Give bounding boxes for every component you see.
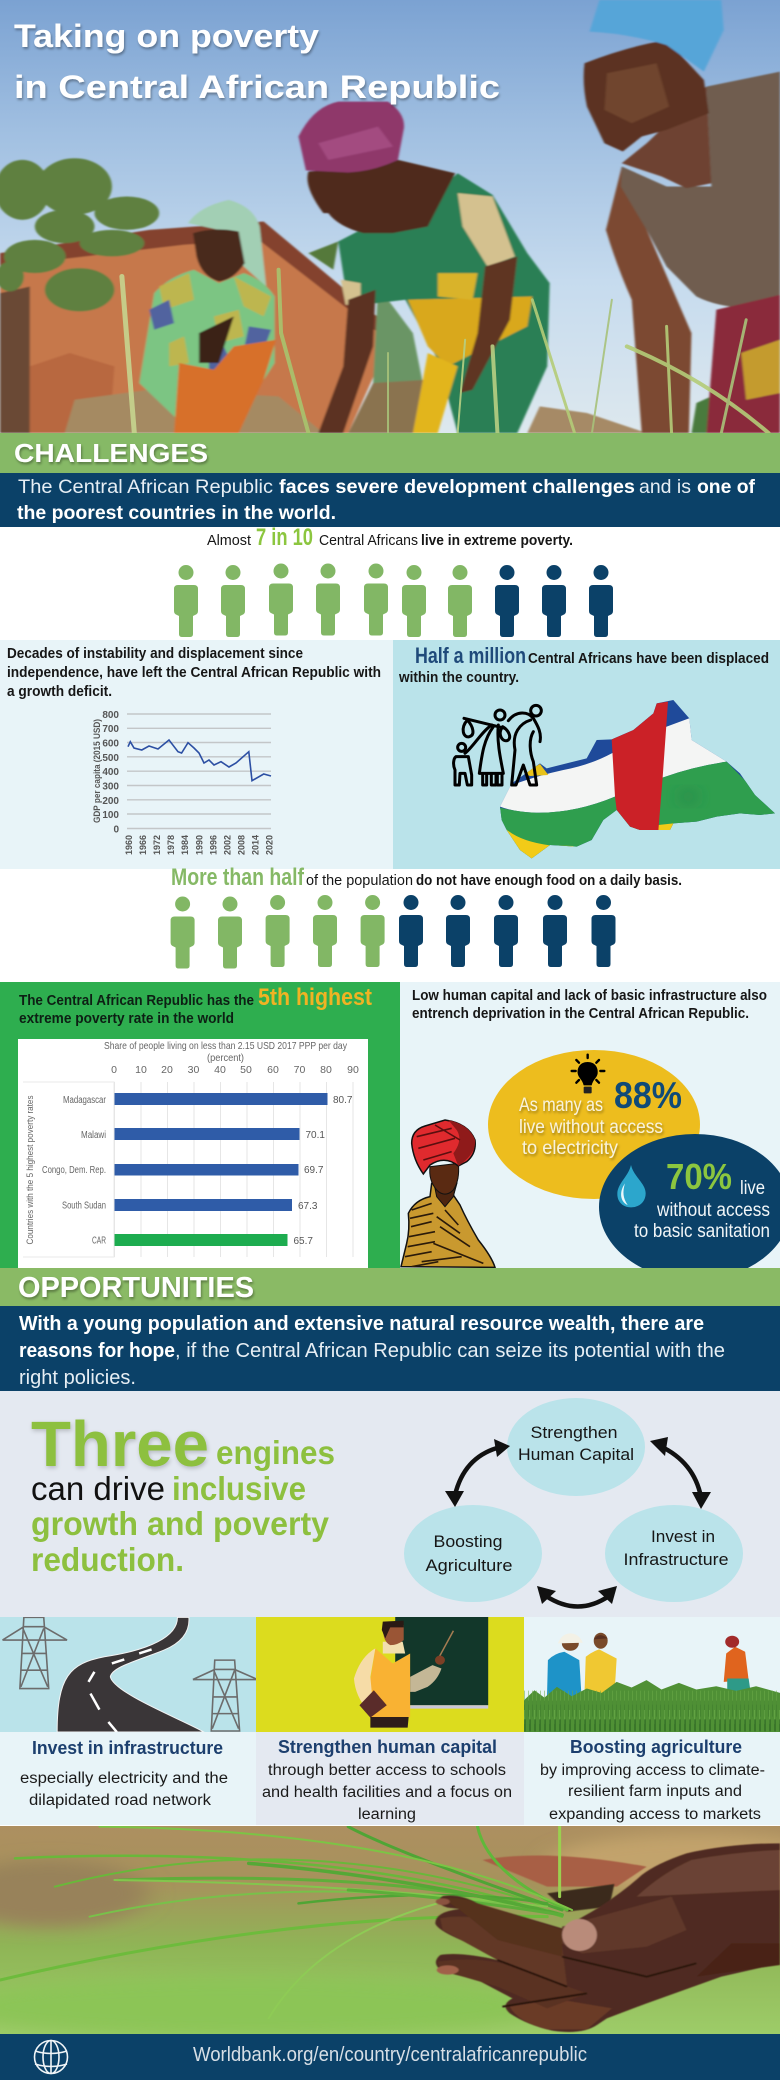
line chart: GDP per capita: 1978 [166, 835, 176, 855]
challenges intro band: and is [639, 476, 691, 498]
bar chart: extreme poverty rates: Share of people living on less than 2.15 USD 2017 PPP per day [104, 1040, 348, 1052]
callout: 70% without sanitation: live [740, 1178, 765, 1199]
bar chart: extreme poverty rates: 80 [320, 1064, 332, 1076]
caption [540, 1736, 765, 1823]
challenges intro band: faces severe development challenges [279, 476, 635, 498]
line chart: GDP per capita: 2008 [236, 835, 246, 855]
caption: especially electricity and the [20, 1770, 228, 1787]
opportunities intro band: reasons for hope [19, 1340, 175, 1362]
icon: light bulb [570, 1054, 606, 1094]
line chart: GDP per capita [92, 710, 274, 855]
node: strengthen human capital: Strengthen [530, 1423, 618, 1442]
map: Central African Republic in flag colours [500, 700, 775, 858]
heading: three engines [31, 1408, 335, 1578]
bar chart: extreme poverty rates: 70.1 [306, 1130, 325, 1141]
node: invest in infrastructure [605, 1505, 743, 1602]
callout: 88% without electricity [488, 1050, 700, 1199]
title: in Central African Republic [14, 69, 500, 105]
bar chart: extreme poverty rates: Madagascar [63, 1095, 107, 1106]
section heading band: opportunities: OPPORTUNITIES [18, 1272, 254, 1304]
pictogram: 5 of 10 people [171, 895, 616, 968]
node: invest in infrastructure: Invest in [651, 1527, 715, 1546]
panel text [398, 643, 769, 686]
bar chart: extreme poverty rates: 0 [111, 1064, 117, 1076]
line chart: GDP per capita: 1990 [194, 835, 204, 855]
bar chart: extreme poverty rates: South Sudan [62, 1200, 106, 1212]
panel: 5th highest poverty rate [0, 982, 400, 1268]
caption: Strengthen human capital [278, 1736, 497, 1757]
challenges intro band: the poorest countries in the world. [17, 502, 336, 524]
panel text: extreme poverty rate in the world [19, 1011, 234, 1027]
heading: three engines: inclusive [172, 1470, 306, 1507]
line chart: GDP per capita: 600 [102, 738, 119, 750]
stat line: more than half lack food: do not have enough food on a daily basis. [416, 872, 682, 889]
callout: 70% without sanitation: 70% [666, 1156, 732, 1197]
footer band [0, 2034, 780, 2080]
column: invest in infrastructure [0, 1617, 257, 1825]
line chart: GDP per capita: 1966 [138, 835, 148, 855]
challenges intro band: The Central African Republic [18, 476, 273, 498]
bar chart: extreme poverty rates: (percent) [207, 1052, 244, 1064]
panel text: independence, have left the Central African Republic with [7, 665, 381, 681]
arrow: human capital to agriculture [445, 1439, 510, 1507]
line chart: GDP per capita: 1996 [208, 835, 218, 855]
stat line: 7 in 10 in extreme poverty: live in extreme poverty. [421, 532, 573, 549]
illustration: teacher at blackboard [256, 1617, 524, 1732]
opportunities intro band: With a young population and extensive natural resource wealth, there are [19, 1313, 704, 1335]
line chart: GDP per capita: 0 [113, 824, 119, 836]
callout: 88% without electricity: live without access [519, 1117, 663, 1138]
illustration: woman with red head wrap [400, 1119, 496, 1268]
heading: three engines: reduction. [31, 1541, 184, 1578]
caption: through better access to schools [268, 1762, 506, 1779]
bar chart: extreme poverty rates: 10 [135, 1064, 147, 1076]
section heading band: opportunities [0, 1268, 780, 1306]
panel: human capital and infrastructure [400, 982, 780, 1280]
heading: three engines: Three [31, 1408, 209, 1480]
bar chart: extreme poverty rates: Malawi [81, 1130, 106, 1141]
stat line: 7 in 10 in extreme poverty: Almost [207, 532, 252, 549]
bar chart: extreme poverty rates [18, 1039, 368, 1268]
caption: expanding access to markets [549, 1806, 761, 1823]
bar chart: extreme poverty rates: 80.7 [333, 1095, 353, 1106]
node: boosting agriculture: Boosting [434, 1532, 502, 1551]
node: strengthen human capital [507, 1398, 645, 1496]
column: strengthen human capital [256, 1617, 524, 1825]
bar chart: extreme poverty rates: 20 [161, 1064, 173, 1076]
line chart: GDP per capita: 1960 [124, 835, 134, 855]
caption [20, 1737, 228, 1809]
challenges intro band: one of [697, 476, 755, 498]
line chart: GDP per capita: 1972 [152, 835, 162, 855]
panel text [7, 646, 381, 700]
node: strengthen human capital: Human Capital [518, 1445, 634, 1464]
callout: 88% without electricity: As many as [519, 1095, 603, 1116]
node: boosting agriculture [404, 1505, 542, 1602]
line chart: GDP per capita: 800 [102, 710, 119, 721]
line chart: GDP per capita: 2014 [250, 835, 260, 855]
bar chart: extreme poverty rates: 60 [267, 1064, 279, 1076]
node: boosting agriculture: Agriculture [426, 1556, 512, 1575]
panel text: Central Africans have been displaced [528, 651, 769, 667]
caption: Boosting agriculture [570, 1736, 742, 1757]
bar chart: extreme poverty rates: 70 [294, 1064, 305, 1076]
line chart: GDP per capita: 200 [102, 796, 119, 807]
bar chart: extreme poverty rates: 90 [347, 1064, 359, 1076]
bar chart: extreme poverty rates: 30 [188, 1064, 199, 1076]
panel: three engines [0, 1391, 780, 1617]
bar chart: extreme poverty rates: 50 [240, 1064, 252, 1076]
icon: water drop [617, 1165, 646, 1208]
stat line: 7 in 10 in extreme poverty: 7 in 10 [256, 524, 313, 551]
line chart: GDP per capita: 700 [102, 724, 119, 735]
caption [262, 1736, 512, 1823]
panel: growth deficit [0, 640, 393, 869]
panel text: Decades of instability and displacement since [7, 646, 303, 662]
panel text: Half a million [415, 643, 526, 668]
stat line: 7 in 10 in extreme poverty [207, 524, 573, 551]
caption: by improving access to climate- [540, 1762, 765, 1779]
bar chart: extreme poverty rates: Countries with the 5 highest poverty rates [25, 1095, 36, 1244]
icon: World Bank globe [34, 2040, 68, 2074]
column: boosting agriculture [524, 1617, 780, 1825]
title [14, 18, 500, 105]
line chart: GDP per capita: 400 [102, 767, 119, 778]
icon: displaced family [452, 704, 543, 786]
bar chart: extreme poverty rates: Congo, Dem. Rep. [42, 1165, 106, 1176]
arrow: human capital to infrastructure [650, 1437, 711, 1509]
panel text [19, 984, 372, 1027]
opportunities intro band: right policies. [19, 1367, 136, 1389]
panel text [412, 988, 767, 1022]
stat line: 7 in 10 in extreme poverty: Central Africans [319, 532, 418, 549]
line chart: GDP per capita: 2002 [222, 835, 232, 855]
title: Taking on poverty [14, 18, 319, 54]
illustration: road and power pylons [0, 1617, 256, 1732]
panel text: The Central African Republic has the [19, 993, 254, 1009]
caption: resilient farm inputs and [568, 1783, 742, 1800]
illustration: farmers in a green field [524, 1617, 780, 1732]
opportunities intro band: , if the Central African Republic can seize its potential with the [175, 1340, 725, 1362]
caption: and health facilities and a focus on [262, 1784, 512, 1801]
heading: three engines: can drive [31, 1470, 165, 1507]
line chart: GDP per capita: 1984 [180, 835, 190, 855]
panel: half a million displaced [393, 640, 780, 870]
panel text: a growth deficit. [7, 684, 112, 700]
heading: three engines: growth and poverty [31, 1505, 330, 1542]
pictogram: 7 of 10 people [174, 564, 613, 637]
arrow: agriculture to infrastructure [537, 1586, 617, 1606]
panel text: entrench deprivation in the Central African Republic. [412, 1006, 749, 1022]
website address: Worldbank.org/en/country/centralafricanrepublic [193, 2044, 587, 2066]
challenges intro band [0, 473, 780, 527]
caption: dilapidated road network [29, 1792, 211, 1809]
caption: Invest in infrastructure [32, 1737, 223, 1758]
section heading band: challenges: CHALLENGES [14, 438, 208, 468]
bar chart: extreme poverty rates: 65.7 [294, 1236, 313, 1247]
bar chart: extreme poverty rates: 69.7 [304, 1165, 324, 1176]
stat line: more than half lack food [171, 864, 682, 891]
heading: three engines: engines [216, 1434, 335, 1471]
callout: 70% without sanitation: without access [656, 1200, 770, 1221]
photo: hands holding a seedling [0, 1826, 780, 2034]
line chart: GDP per capita: 100 [102, 810, 119, 821]
opportunities intro band [0, 1306, 780, 1391]
line chart: GDP per capita: GDP per capita (2015 USD) [92, 719, 102, 823]
caption: learning [358, 1806, 416, 1823]
section heading band: challenges [0, 433, 780, 473]
stat line: more than half lack food: More than half [171, 864, 305, 891]
callout: 88% without electricity: 88% [614, 1075, 682, 1116]
line chart: GDP per capita: 500 [102, 753, 119, 764]
line chart: GDP per capita: 300 [102, 782, 119, 792]
node: invest in infrastructure: Infrastructure [624, 1550, 728, 1569]
line chart: GDP per capita: 2020 [264, 835, 274, 855]
hero photo: women farming [0, 0, 780, 433]
bar chart: extreme poverty rates: 67.3 [298, 1201, 318, 1212]
stat line: more than half lack food: of the population [306, 872, 413, 889]
panel text: 5th highest [258, 984, 372, 1011]
callout: 70% without sanitation [599, 1134, 780, 1268]
bar chart: extreme poverty rates: CAR [92, 1236, 106, 1246]
panel text: within the country. [398, 670, 519, 686]
bar chart: extreme poverty rates: 40 [214, 1064, 226, 1076]
callout: 88% without electricity: to electricity [522, 1138, 618, 1159]
diagram: three engines cycle [404, 1398, 743, 1606]
